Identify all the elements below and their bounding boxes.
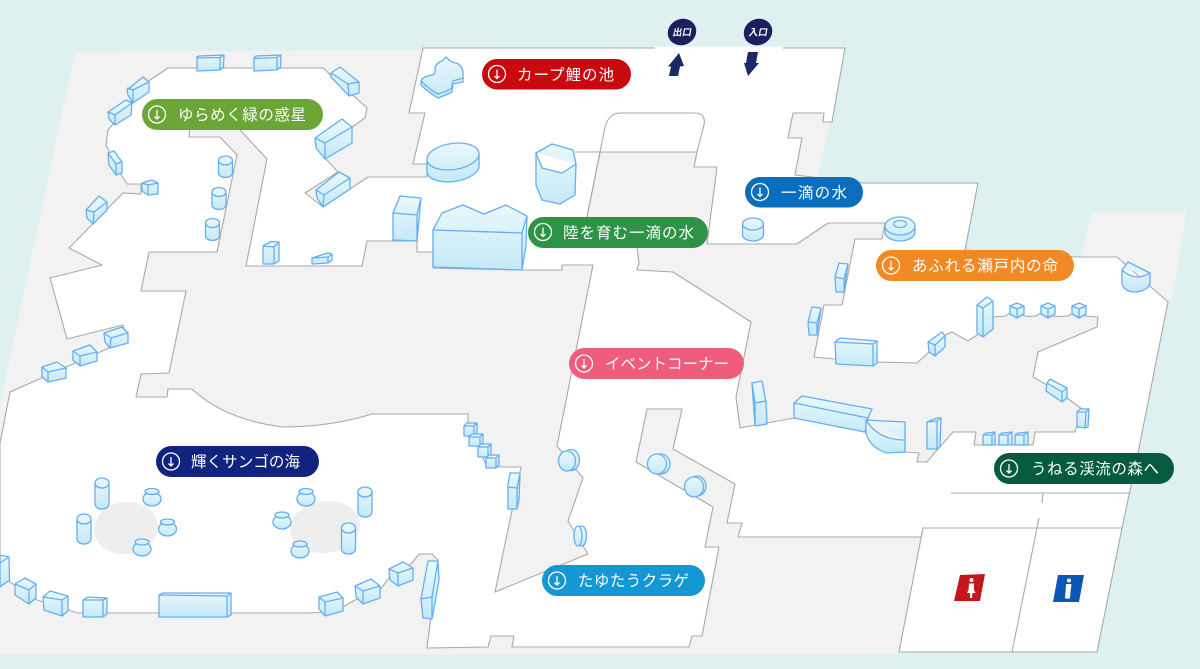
label: たゆたうクラゲ: たゆたうクラゲ — [578, 572, 689, 590]
label: ゆらめく緑の惑星: ゆらめく緑の惑星 — [178, 106, 306, 124]
label: イベントコーナー: イベントコーナー — [605, 356, 729, 373]
cylinder tank — [742, 218, 764, 241]
label: たゆたうクラゲ — [542, 565, 705, 596]
tanks: green planet zone — [42, 55, 359, 382]
label: うねる渓流の森へ: うねる渓流の森へ — [1031, 460, 1159, 478]
gray island: coral left — [91, 498, 161, 558]
label: カープ鯉の池 — [482, 59, 631, 90]
floor plate — [0, 48, 930, 655]
icon: men's restroom — [1053, 575, 1084, 602]
ring tank — [885, 217, 915, 241]
label: うねる渓流の森へ — [994, 453, 1174, 484]
icon: women's restroom — [954, 574, 985, 601]
entrance opening — [655, 47, 783, 49]
oval tank — [427, 143, 479, 182]
octagonal tank — [536, 144, 576, 204]
label: ゆらめく緑の惑星 — [142, 99, 323, 130]
exit arrow — [668, 53, 684, 76]
label: あふれる瀬戸内の命: あふれる瀬戸内の命 — [912, 257, 1058, 275]
big tank — [433, 205, 527, 270]
entrance arrow — [744, 52, 759, 76]
entrance badge: 入口 — [748, 28, 769, 38]
tanks: coral sea zone — [0, 423, 520, 619]
floor plan: central-right hall — [587, 152, 1098, 462]
floor plate: right wedge — [1080, 212, 1186, 300]
tanks: upper hall — [393, 57, 915, 270]
cube tank — [393, 196, 421, 241]
label: 陸を育む一滴の水: 陸を育む一滴の水 — [563, 224, 694, 242]
entrance badge — [739, 14, 777, 50]
koi pond — [421, 57, 463, 98]
label: 輝くサンゴの海: 輝くサンゴの海 — [191, 452, 300, 471]
label: あふれる瀬戸内の命 — [876, 250, 1074, 281]
exit badge — [663, 14, 701, 50]
floor plan: central-left hall — [136, 125, 593, 592]
label: 陸を育む一滴の水 — [528, 217, 708, 248]
floor plan: restroom partitions — [923, 493, 1130, 652]
exit badge: 出口 — [672, 27, 693, 38]
label: 輝くサンゴの海 — [156, 446, 319, 477]
tanks: inland sea zone — [752, 262, 1150, 453]
label: カープ鯉の池: カープ鯉の池 — [517, 66, 614, 84]
tanks: jellyfish zone discs — [558, 450, 706, 546]
label: 一滴の水 — [745, 177, 863, 208]
label: 一滴の水: 一滴の水 — [781, 184, 847, 202]
gray island: coral right — [287, 496, 363, 558]
label: イベントコーナー — [569, 348, 744, 379]
floor plan: rounded room outline — [575, 113, 704, 217]
